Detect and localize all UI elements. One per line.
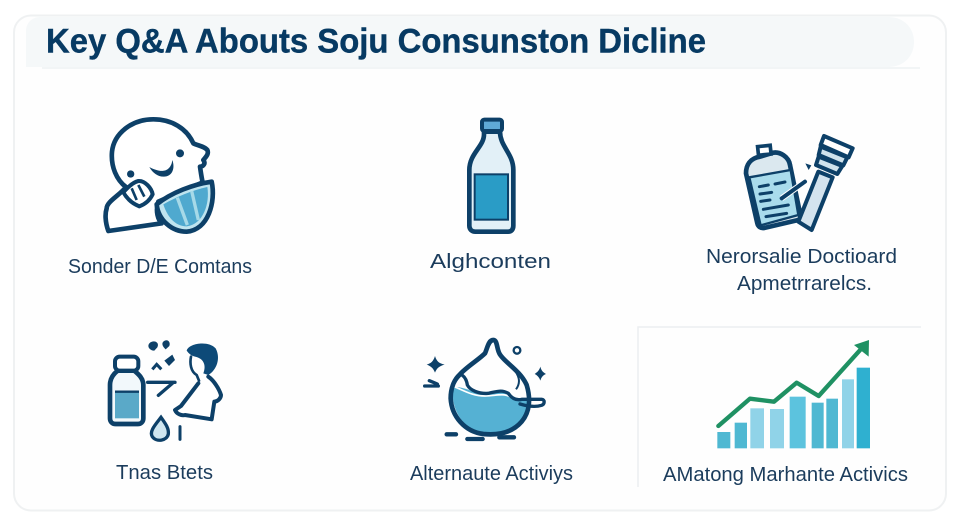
icon: bottle, person and drop [110,340,221,440]
icon: round flask with liquid [425,340,546,439]
icon: bottle [469,120,513,232]
header band [26,17,920,68]
label: AMatong Marhante Activics [663,464,908,486]
icon: face with glass [106,119,213,232]
label: Alghconten [430,251,551,273]
trend arrow [718,340,869,426]
panel: marketing activities chart [638,327,921,487]
chart frame [638,327,921,487]
label: Alternaute Activiys [410,463,573,485]
panel: side effects [110,340,221,484]
title: Key Q&A Abouts Soju Consunston Dicline [46,22,706,60]
panel: soju drinker [68,119,252,278]
label [706,246,897,295]
label: Apmetrrarelcs. [737,273,872,295]
label: Nerorsalie Doctioard [706,246,897,268]
panel: doctor's note [706,136,897,295]
panel: alternative activities [410,340,573,485]
icon: bottle and tube [746,136,853,230]
panel: alcohol content [430,120,551,273]
bar chart [717,340,870,448]
label: Sonder D/E Comtans [68,256,252,278]
label: Tnas Btets [116,462,213,484]
